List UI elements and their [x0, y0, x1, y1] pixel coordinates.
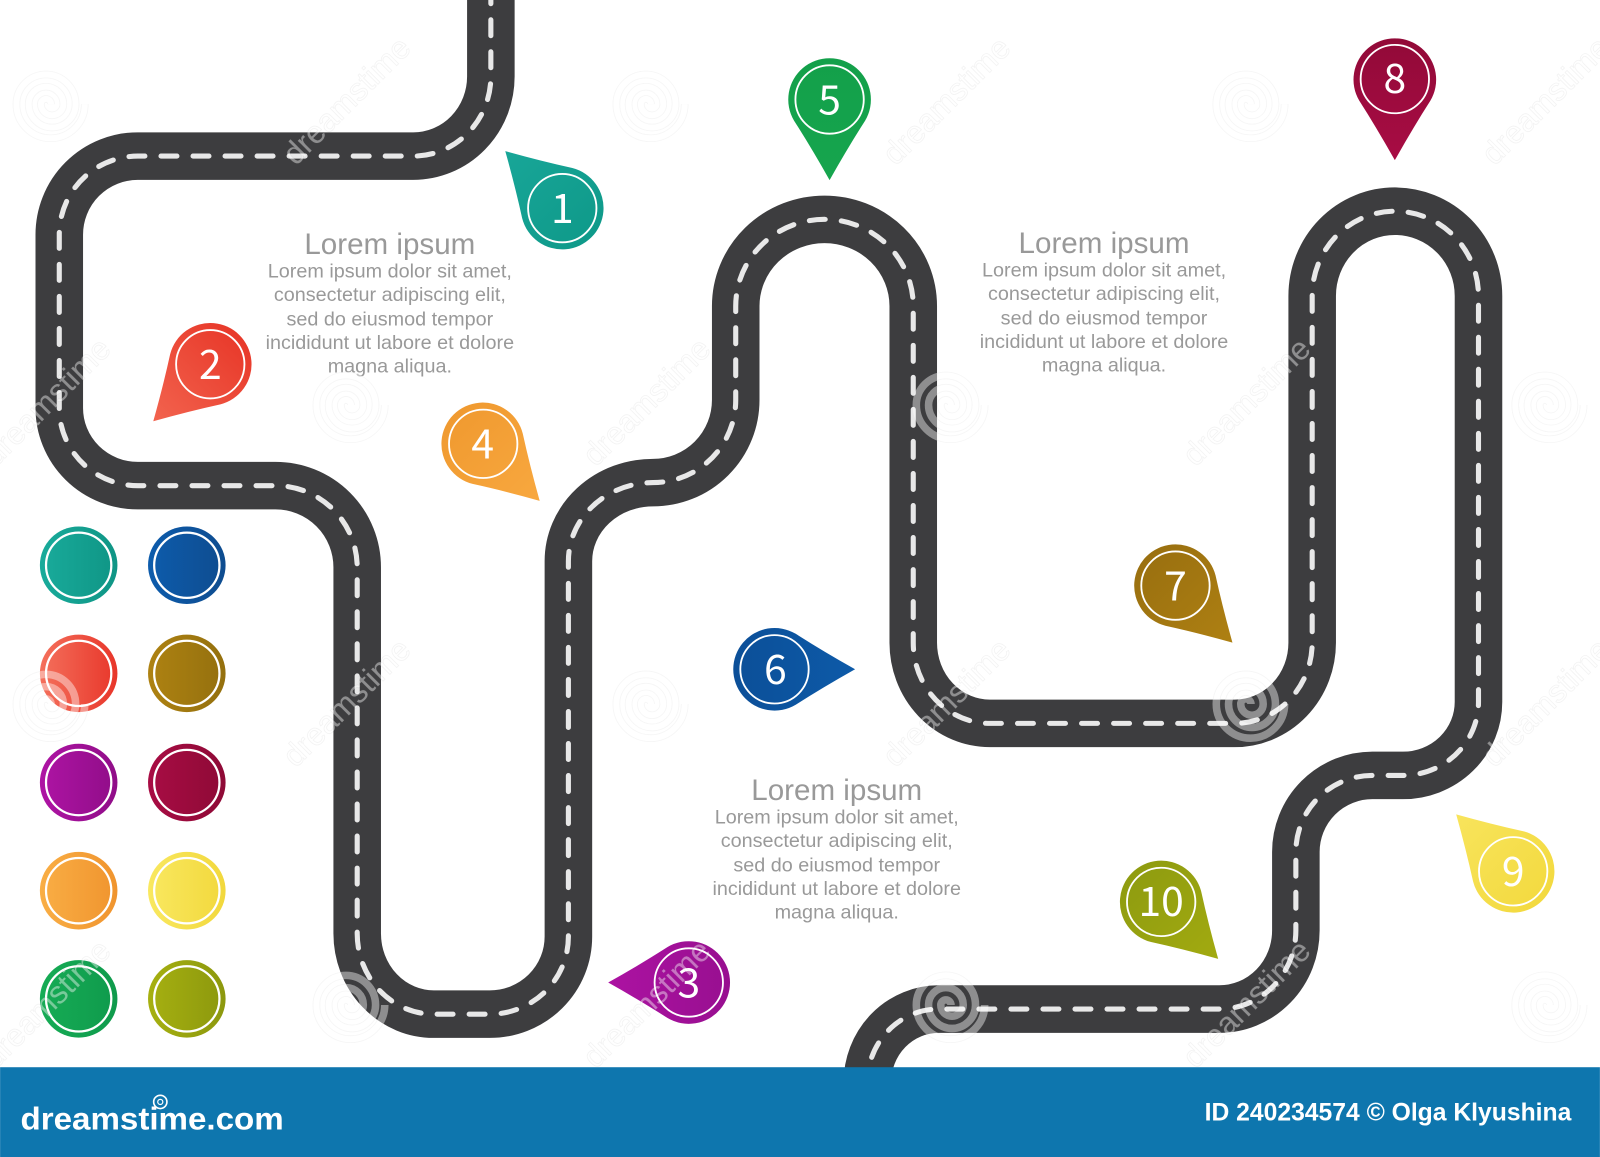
pin 10: 10	[1139, 869, 1184, 928]
text block: bottom center: sed do eiusmod tempor	[733, 854, 941, 876]
pin 3	[608, 941, 730, 1024]
watermark text: dreamstime	[1175, 330, 1317, 472]
text block: top right	[980, 227, 1228, 376]
footer credit: ID 240234574 © Olga Klyushina	[1205, 1099, 1572, 1126]
watermark text: dreamstime	[575, 330, 717, 472]
text block: bottom center: Lorem ipsum dolor sit amet,	[715, 806, 959, 828]
pin 10	[1103, 844, 1247, 988]
text block: bottom center: incididunt ut labore et dolore	[712, 878, 961, 900]
pin 7	[1117, 527, 1262, 672]
pin 4	[424, 385, 569, 530]
pin 3: 3	[677, 950, 700, 1009]
pin 1	[476, 122, 621, 267]
pin 6: 6	[764, 637, 787, 696]
watermark text: dreamstime	[875, 29, 1017, 171]
text block: top right: magna aliqua.	[1042, 354, 1166, 376]
text block: top left: Lorem ipsum dolor sit amet,	[268, 261, 512, 283]
pin 5	[788, 58, 871, 180]
watermark text: dreamstime	[575, 932, 717, 1074]
text block: top left: magna aliqua.	[328, 355, 452, 377]
text block: top left	[266, 228, 514, 377]
watermark text: dreamstime	[875, 631, 1017, 773]
pin 6	[733, 628, 855, 711]
footer bar	[0, 1067, 1600, 1157]
watermark text: dreamstime	[275, 29, 417, 171]
text block: bottom center	[712, 774, 961, 923]
pin 7: 7	[1164, 553, 1187, 612]
text block: top left: Lorem ipsum	[304, 228, 475, 261]
pin 8: 8	[1383, 46, 1406, 105]
watermark text: dreamstime	[275, 631, 417, 773]
text block: top right: consectetur adipiscing elit,	[988, 283, 1220, 305]
pin 1: 1	[551, 176, 574, 235]
pin 5: 5	[818, 67, 841, 126]
text block: top left: consectetur adipiscing elit,	[274, 284, 506, 306]
pin 2	[124, 306, 269, 450]
pin 2: 2	[199, 332, 222, 391]
text block: top left: incididunt ut labore et dolore	[266, 332, 514, 354]
text block: top right: Lorem ipsum dolor sit amet,	[982, 259, 1226, 281]
text block: top left: sed do eiusmod tempor	[286, 308, 494, 330]
pin 8	[1354, 38, 1436, 160]
colour palette circles	[40, 526, 226, 1038]
text block: top right: sed do eiusmod tempor	[1001, 307, 1208, 329]
text block: bottom center: magna aliqua.	[775, 901, 899, 923]
pin 9	[1427, 785, 1572, 930]
text block: top right: incididunt ut labore et dolore	[980, 331, 1228, 353]
text block: top right: Lorem ipsum	[1019, 227, 1190, 260]
pin 9: 9	[1502, 839, 1525, 898]
footer logo: dreamstime.com	[21, 1100, 284, 1136]
watermark text: dreamstime	[1175, 932, 1317, 1074]
pin 4: 4	[471, 412, 494, 471]
text block: bottom center: Lorem ipsum	[751, 774, 922, 807]
text block: bottom center: consectetur adipiscing elit,	[721, 830, 953, 852]
